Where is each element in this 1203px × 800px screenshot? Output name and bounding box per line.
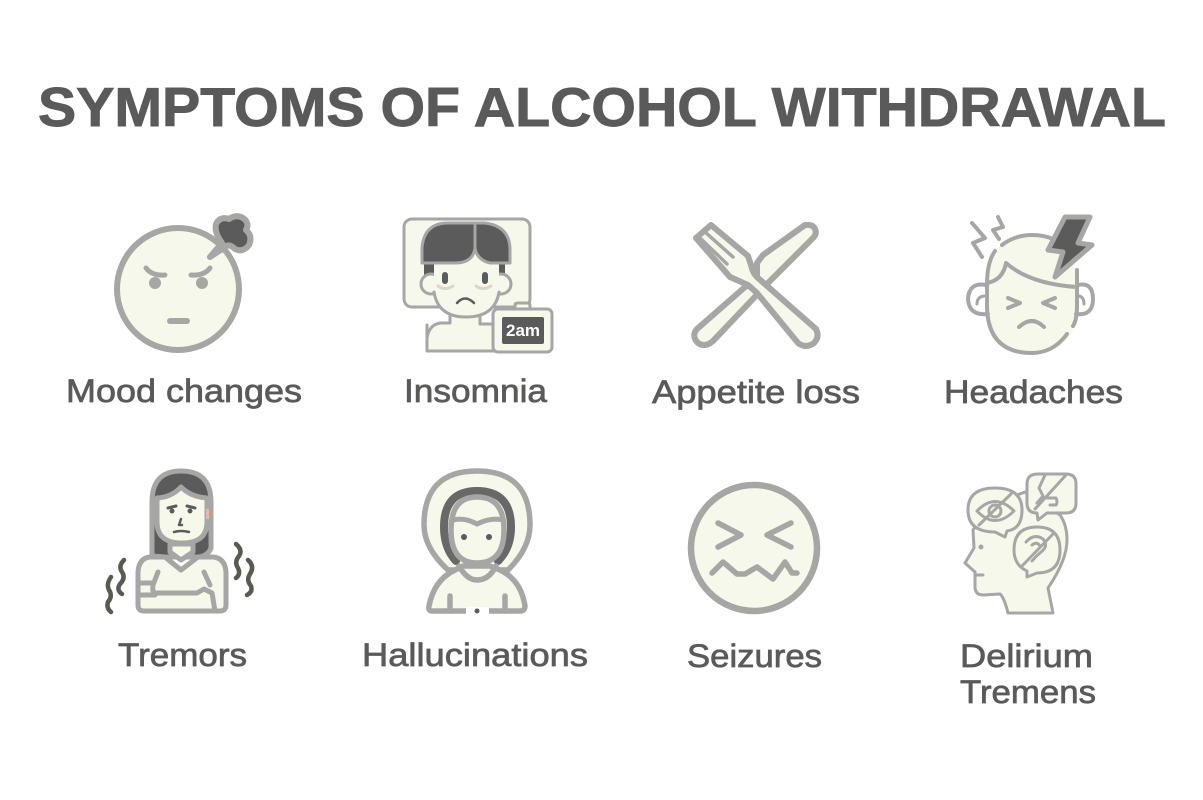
label: delirium tremens: Tremens: [960, 674, 1096, 710]
icon: seizure face: [691, 485, 817, 611]
label: hallucinations: Hallucinations: [362, 637, 588, 673]
clock time: 2am: [506, 321, 540, 340]
label: tremors: Tremors: [118, 637, 247, 673]
icon: insomnia: [404, 219, 552, 352]
label: headaches: Headaches: [944, 374, 1123, 410]
icon: delirium tremens head: [965, 474, 1076, 613]
label: delirium tremens: Delirium: [960, 638, 1093, 674]
icon: angry face: [117, 216, 250, 350]
label: insomnia: Insomnia: [404, 373, 547, 409]
label: delirium tremens: [960, 638, 1096, 710]
label: appetite loss: Appetite loss: [652, 374, 860, 410]
title: SYMPTOMS OF ALCOHOL WITHDRAWAL: [38, 76, 1166, 138]
icon: hallucinations: [424, 471, 530, 615]
icon: headache: [968, 217, 1093, 353]
label: mood changes: Mood changes: [66, 373, 302, 409]
icon: crossed fork and knife: [694, 225, 818, 346]
icon: tremors: [107, 471, 252, 612]
label: seizures: Seizures: [687, 638, 822, 674]
